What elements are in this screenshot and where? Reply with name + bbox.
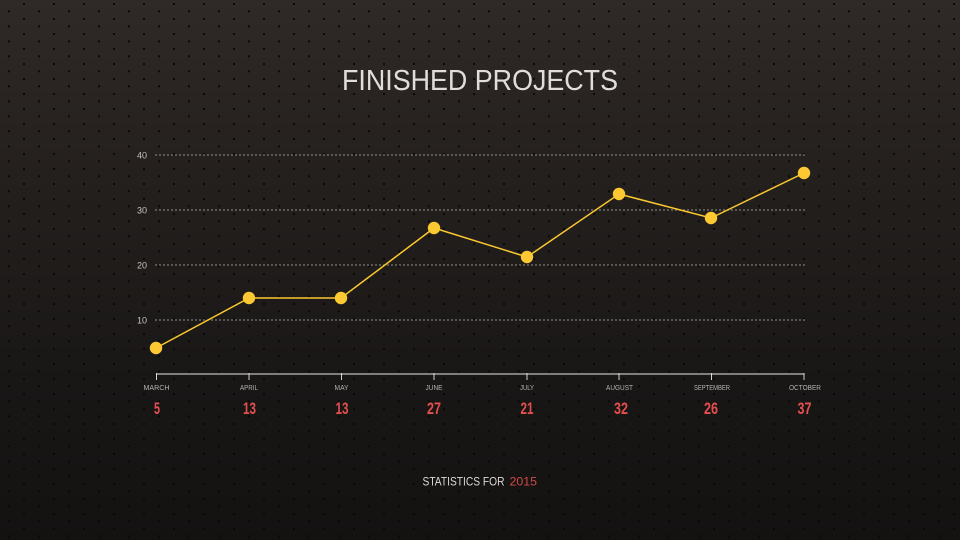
- y axis labels: 10: [137, 316, 147, 326]
- month labels: [144, 385, 821, 392]
- monthly values: 21: [520, 399, 534, 418]
- monthly values: 13: [243, 399, 256, 418]
- data point markers: [150, 167, 810, 354]
- month labels: JULY: [520, 385, 534, 392]
- month labels: JUNE: [426, 385, 443, 392]
- y axis labels: [137, 150, 147, 326]
- month labels: AUGUST: [606, 385, 634, 392]
- month labels: OCTOBER: [789, 385, 821, 392]
- y axis labels: 40: [137, 150, 147, 160]
- monthly values: 27: [427, 399, 441, 418]
- month labels: APRIL: [240, 385, 258, 392]
- month labels: MARCH: [144, 385, 170, 392]
- monthly values: 5: [154, 399, 160, 418]
- data line: [156, 173, 804, 348]
- title: FINISHED PROJECTS: [342, 65, 618, 97]
- line chart: [137, 150, 821, 418]
- monthly values: [154, 399, 812, 418]
- x axis line: [156, 373, 804, 380]
- monthly values: 13: [336, 399, 348, 418]
- monthly values: 37: [798, 399, 812, 418]
- month labels: MAY: [334, 385, 349, 392]
- y axis labels: 20: [137, 260, 147, 270]
- month labels: SEPTEMBER: [694, 385, 730, 392]
- monthly values: 32: [614, 399, 628, 418]
- footer: statistics for 2015: 2015: [510, 475, 537, 489]
- footer: statistics for 2015: STATISTICS FOR: [422, 475, 505, 489]
- y axis labels: 30: [137, 206, 147, 216]
- monthly values: 26: [704, 399, 718, 418]
